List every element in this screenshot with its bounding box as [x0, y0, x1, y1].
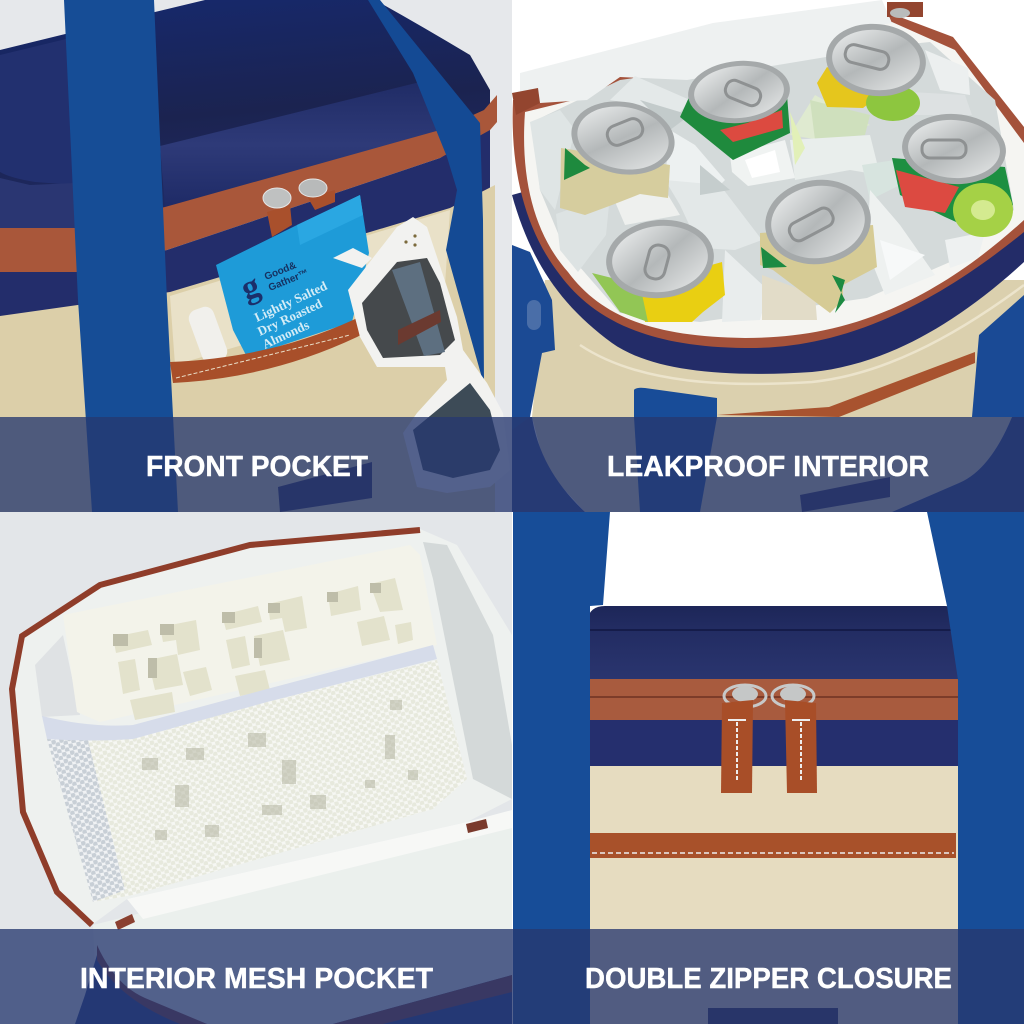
- lid left pad: [0, 38, 75, 185]
- lid padded face: [160, 83, 436, 196]
- lid inner pale area: [35, 635, 80, 717]
- can 1: [560, 101, 675, 215]
- panel: interior mesh pocket: [0, 512, 512, 1024]
- zipper pull left: [721, 685, 766, 793]
- zipper pulls: [263, 179, 335, 237]
- packet product line three: Almonds: [260, 317, 311, 352]
- lid brown zipper edge: [12, 530, 420, 925]
- zipper pull right: [772, 685, 817, 793]
- panel: leakproof interior: [512, 0, 1024, 512]
- lower navy band: [0, 130, 490, 318]
- front handle left: [634, 388, 717, 512]
- navy base: [75, 955, 207, 1024]
- almond packet: [216, 195, 369, 357]
- cream canvas body: [589, 766, 962, 1024]
- front handle right: [972, 295, 1024, 417]
- ice cubes: [530, 50, 985, 322]
- lid flap: [520, 0, 892, 103]
- lower rim of lining: [127, 810, 512, 919]
- mesh pocket: [42, 645, 467, 902]
- white liner: [524, 22, 1024, 338]
- hinge tab right: [466, 819, 488, 833]
- right handle strap: [927, 512, 1024, 1024]
- lid side lining: [423, 542, 512, 799]
- ice pack: [63, 545, 437, 722]
- packet brand line two: Gather™: [267, 268, 310, 294]
- brown pocket trim: [590, 833, 956, 858]
- brown pocket trim: [717, 352, 975, 417]
- bag lid top: [0, 0, 490, 208]
- can 4: [892, 110, 1013, 237]
- stitch line: [580, 285, 1024, 384]
- navy band: [587, 720, 962, 766]
- cream body: [532, 280, 1024, 512]
- caption band: [0, 929, 512, 1024]
- maker patch: [800, 477, 890, 512]
- cream canvas body: [0, 185, 495, 512]
- left handle strap: [513, 512, 610, 1024]
- caption: leakproof interior: LEAKPROOF INTERIOR: [607, 451, 929, 483]
- caption: front pocket: FRONT POCKET: [146, 451, 368, 483]
- can 5: [760, 173, 877, 313]
- lower bag lining: [93, 820, 512, 1024]
- maker patch: [278, 462, 372, 512]
- ice mass: [532, 42, 1014, 322]
- brown base strip: [97, 945, 207, 1024]
- packet brand: Good&: [263, 260, 298, 283]
- bag lid: [587, 606, 960, 680]
- can 6: [592, 215, 725, 322]
- right handle strap: [368, 0, 484, 385]
- pocket back panel: [170, 210, 450, 365]
- caption: double zipper closure: DOUBLE ZIPPER CLOSURE: [585, 963, 952, 995]
- lower navy base left: [512, 417, 585, 512]
- caption band: [512, 417, 1024, 512]
- brown zipper band: [587, 679, 960, 720]
- lip balm: [188, 306, 228, 360]
- brown pocket trim: [170, 318, 360, 383]
- lower navy base right: [892, 417, 1024, 512]
- hinge tab left: [115, 914, 135, 930]
- brown zipper rim: [513, 14, 1024, 348]
- caption band: [0, 417, 512, 512]
- caption band: [512, 929, 1024, 1024]
- packet logo: g: [236, 267, 265, 308]
- left handle strap: [64, 0, 178, 512]
- hinge snap right: [887, 2, 923, 18]
- panel: front pocket: [0, 0, 512, 512]
- can 3: [817, 19, 929, 121]
- packet product line two: Dry Roasted: [255, 295, 325, 339]
- caption: interior mesh pocket: INTERIOR MESH POCKET: [80, 963, 433, 995]
- left side strap tab: [512, 245, 555, 430]
- brown zipper band: [0, 95, 497, 273]
- panel: double zipper closure: [512, 512, 1024, 1024]
- packet product name: Lightly Salted: [252, 278, 330, 325]
- sunglasses: [333, 217, 510, 493]
- can 2: [680, 57, 793, 160]
- navy rim: [512, 190, 1024, 374]
- maker patch: [708, 1008, 838, 1024]
- hinge snap left: [512, 88, 540, 115]
- can pull tabs: [605, 43, 966, 281]
- lid rim lining: [9, 529, 512, 924]
